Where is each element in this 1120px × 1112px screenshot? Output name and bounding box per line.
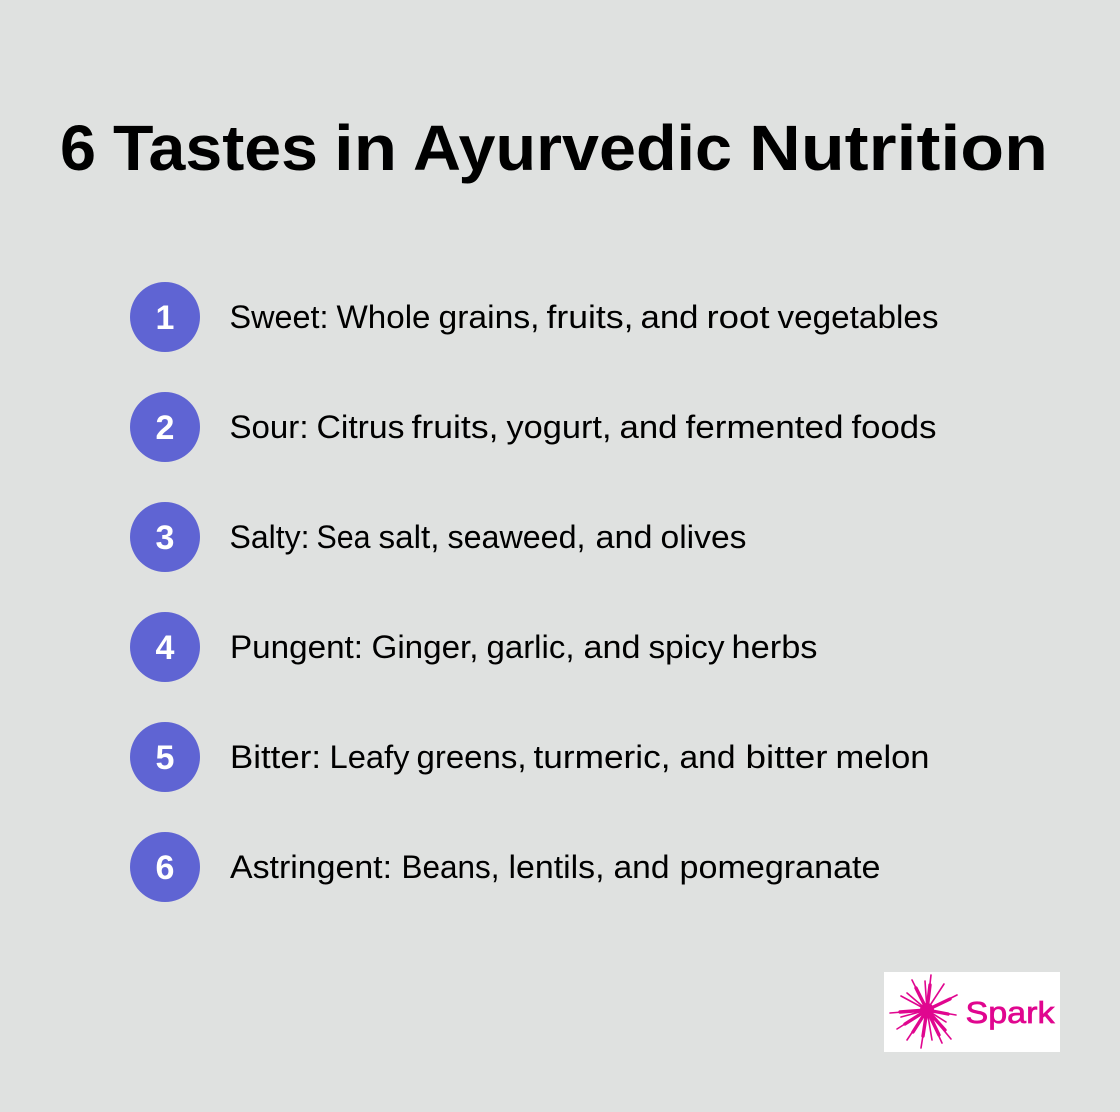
logo: Spark (884, 972, 1060, 1052)
logo wordmark: Spark (966, 995, 1055, 1030)
item 6: astringent (130, 832, 880, 902)
title: Tastes (113, 112, 318, 184)
item 3: salty: salt, (378, 519, 440, 555)
title: 6 (60, 112, 96, 184)
item 2: sour: and (620, 409, 678, 445)
item 3: salty: Sea (316, 519, 371, 555)
title: in (334, 112, 397, 184)
item 2: sour: fruits, (412, 409, 498, 445)
item 2: sour: Citrus (316, 409, 404, 445)
item 2: sour: fermented (686, 409, 844, 445)
item 1: sweet: Sweet: (230, 299, 328, 335)
item 6: astringent: lentils, (508, 849, 604, 885)
item 5: bitter: bitter (746, 739, 828, 775)
title (60, 112, 1048, 184)
item 1: sweet: Whole (336, 299, 430, 335)
title: Nutrition (749, 112, 1048, 184)
item 5: bitter: and (680, 739, 736, 775)
item 1: sweet: root (706, 299, 770, 335)
item 2: sour: yogurt, (506, 409, 612, 445)
item 3: salty: Salty: (230, 519, 310, 555)
item 5: bitter: Bitter: (230, 739, 321, 775)
item 1: sweet: vegetables (778, 299, 938, 335)
icon: starburst (890, 975, 957, 1048)
item 4: pungent (130, 612, 818, 682)
item 6: astringent: and (614, 849, 670, 885)
item 4: pungent: and (584, 629, 640, 665)
item 6: astringent: 6 (156, 849, 174, 887)
item 3: salty: 3 (156, 519, 174, 557)
item 4: pungent: Ginger, (372, 629, 478, 665)
item 2: sour: foods (852, 409, 936, 445)
item 5: bitter: Leafy (330, 739, 410, 775)
item 5: bitter: greens, (416, 739, 526, 775)
item 2: sour: 2 (156, 409, 174, 447)
item 1: sweet: grains, (438, 299, 540, 335)
item 6: astringent: Astringent: (230, 849, 392, 885)
item 5: bitter: melon (836, 739, 930, 775)
item 5: bitter: turmeric, (534, 739, 670, 775)
title: Ayurvedic (413, 112, 732, 184)
item 1: sweet (130, 282, 938, 352)
item 2: sour (130, 392, 936, 462)
item 3: salty: olives (660, 519, 746, 555)
item 1: sweet: fruits, (546, 299, 634, 335)
item 3: salty (130, 502, 746, 572)
item 3: salty: and (596, 519, 652, 555)
item 4: pungent: herbs (732, 629, 818, 665)
item 5: bitter (130, 722, 930, 792)
list of tastes (130, 282, 938, 902)
item 4: pungent: garlic, (486, 629, 574, 665)
item 4: pungent: spicy (648, 629, 724, 665)
item 3: salty: seaweed, (448, 519, 586, 555)
item 6: astringent: Beans, (402, 849, 500, 885)
item 6: astringent: pomegranate (680, 849, 880, 885)
item 2: sour: Sour: (230, 409, 308, 445)
item 4: pungent: 4 (156, 629, 175, 667)
item 1: sweet: 1 (156, 299, 174, 337)
item 5: bitter: 5 (156, 739, 174, 777)
item 1: sweet: and (640, 299, 698, 335)
item 4: pungent: Pungent: (230, 629, 363, 665)
